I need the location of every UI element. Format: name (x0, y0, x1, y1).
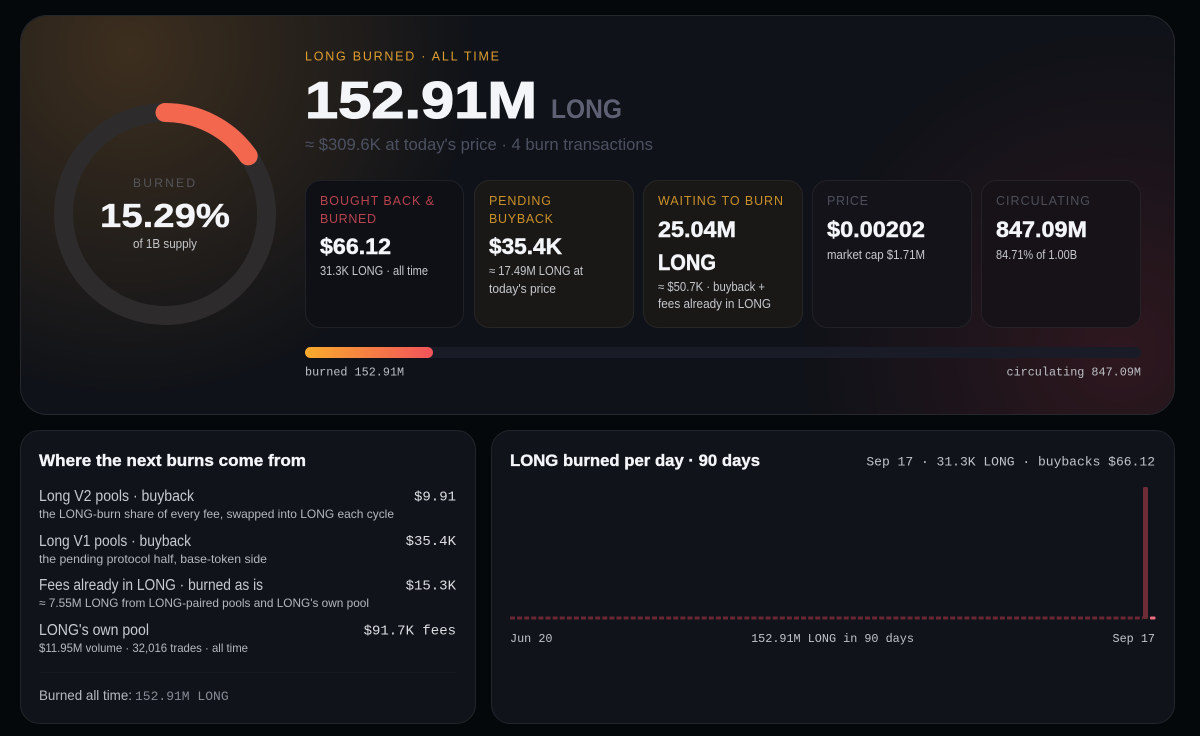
row: V1 pools (39, 533, 457, 566)
card: pending buyback: today's price (489, 282, 556, 296)
progress bar: burned vs circulating: burned 152.91M (305, 366, 404, 380)
progress bar: burned vs circulating (305, 347, 1141, 380)
card: pending buyback: BUYBACK (489, 212, 554, 226)
bar chart: daily burns (510, 487, 1156, 620)
card: pending buyback: $35.4K (489, 234, 562, 259)
card: pending buyback (474, 180, 634, 328)
x-axis labels (510, 632, 1155, 646)
row: V2 pools: $9.91 (414, 490, 456, 506)
card: waiting to burn: LONG (658, 250, 716, 275)
ring chart: 15.29% burned: BURNED (133, 176, 195, 190)
card: price: market cap $1.71M (827, 248, 925, 262)
card: pending buyback: PENDING (489, 194, 551, 208)
footer: burned all time (39, 687, 229, 704)
row: V2 pools: the LONG-burn share of every fee, swapped into LONG each cycle (39, 507, 394, 521)
row: LONG's own pool: LONG's own pool (39, 622, 149, 639)
panel: burn summary (20, 16, 1174, 414)
card: waiting to burn: 25.04M (658, 217, 736, 242)
headline subtext: ≈ $309.6K at today's price · 4 burn transactions (305, 135, 653, 154)
x-axis labels: 152.91M LONG in 90 days (751, 632, 914, 646)
headline figure: LONG (551, 94, 622, 124)
card: bought back and burned (306, 180, 464, 328)
ring chart: 15.29% burned (64, 112, 266, 316)
row: V2 pools (39, 488, 456, 521)
card: pending buyback: ≈ 17.49M LONG at (489, 264, 583, 278)
row: LONG's own pool: $91.7K fees (364, 624, 456, 640)
card: circulating (982, 180, 1140, 328)
ring chart: 15.29% burned: of 1B supply (133, 237, 198, 251)
x-axis labels: Jun 20 (510, 632, 552, 646)
card: price: PRICE (827, 194, 868, 208)
card: circulating: CIRCULATING (996, 194, 1090, 208)
row: V1 pools: the pending protocol half, base-token side (39, 552, 267, 566)
card: bought back and burned: BURNED (320, 212, 376, 226)
row: LONG's own pool (39, 622, 456, 655)
headline figure (305, 72, 622, 130)
footer: burned all time: 152.91M LONG (135, 689, 229, 704)
card: price (812, 180, 972, 328)
card: waiting to burn (644, 180, 802, 328)
x-axis labels: Sep 17 (1113, 632, 1155, 646)
row: V1 pools: $35.4K (406, 534, 457, 550)
panel: where the next burns come from (20, 430, 476, 724)
row: fees already in LONG: Fees already in LONG · burned as is (39, 577, 263, 594)
row: fees already in LONG (39, 577, 457, 610)
card: bought back and burned: BOUGHT BACK & (320, 194, 435, 208)
row: V2 pools: Long V2 pools · buyback (39, 488, 194, 505)
eyebrow heading: LONG BURNED · ALL TIME (305, 50, 499, 64)
card: bought back and burned: 31.3K LONG · all time (320, 264, 428, 278)
headline figure: 152.91M (305, 72, 537, 130)
row: V1 pools: Long V1 pools · buyback (39, 533, 191, 550)
panel: LONG burned per day chart (492, 430, 1174, 724)
progress bar: burned vs circulating: circulating 847.09M (1006, 366, 1141, 380)
card: circulating: 847.09M (996, 217, 1087, 242)
card: bought back and burned: $66.12 (320, 234, 391, 259)
chart latest-day summary: Sep 17 · 31.3K LONG · buybacks $66.12 (866, 454, 1155, 470)
card: waiting to burn: fees already in LONG (658, 297, 771, 311)
panel heading: Where the next burns come from (39, 451, 306, 470)
ring chart: 15.29% burned: 15.29% (100, 197, 230, 234)
row: LONG's own pool: $11.95M volume · 32,016 trades · all time (39, 641, 248, 655)
row: fees already in LONG: ≈ 7.55M LONG from LONG-paired pools and LONG's own pool (39, 596, 369, 610)
card: circulating: 84.71% of 1.00B (996, 248, 1077, 262)
row: fees already in LONG: $15.3K (406, 578, 457, 594)
card: waiting to burn: WAITING TO BURN (658, 194, 783, 208)
footer: burned all time: Burned all time: (39, 687, 132, 703)
card: price: $0.00202 (827, 217, 925, 242)
card: waiting to burn: ≈ $50.7K · buyback + (658, 280, 765, 294)
chart heading: LONG burned per day · 90 days (510, 451, 760, 470)
